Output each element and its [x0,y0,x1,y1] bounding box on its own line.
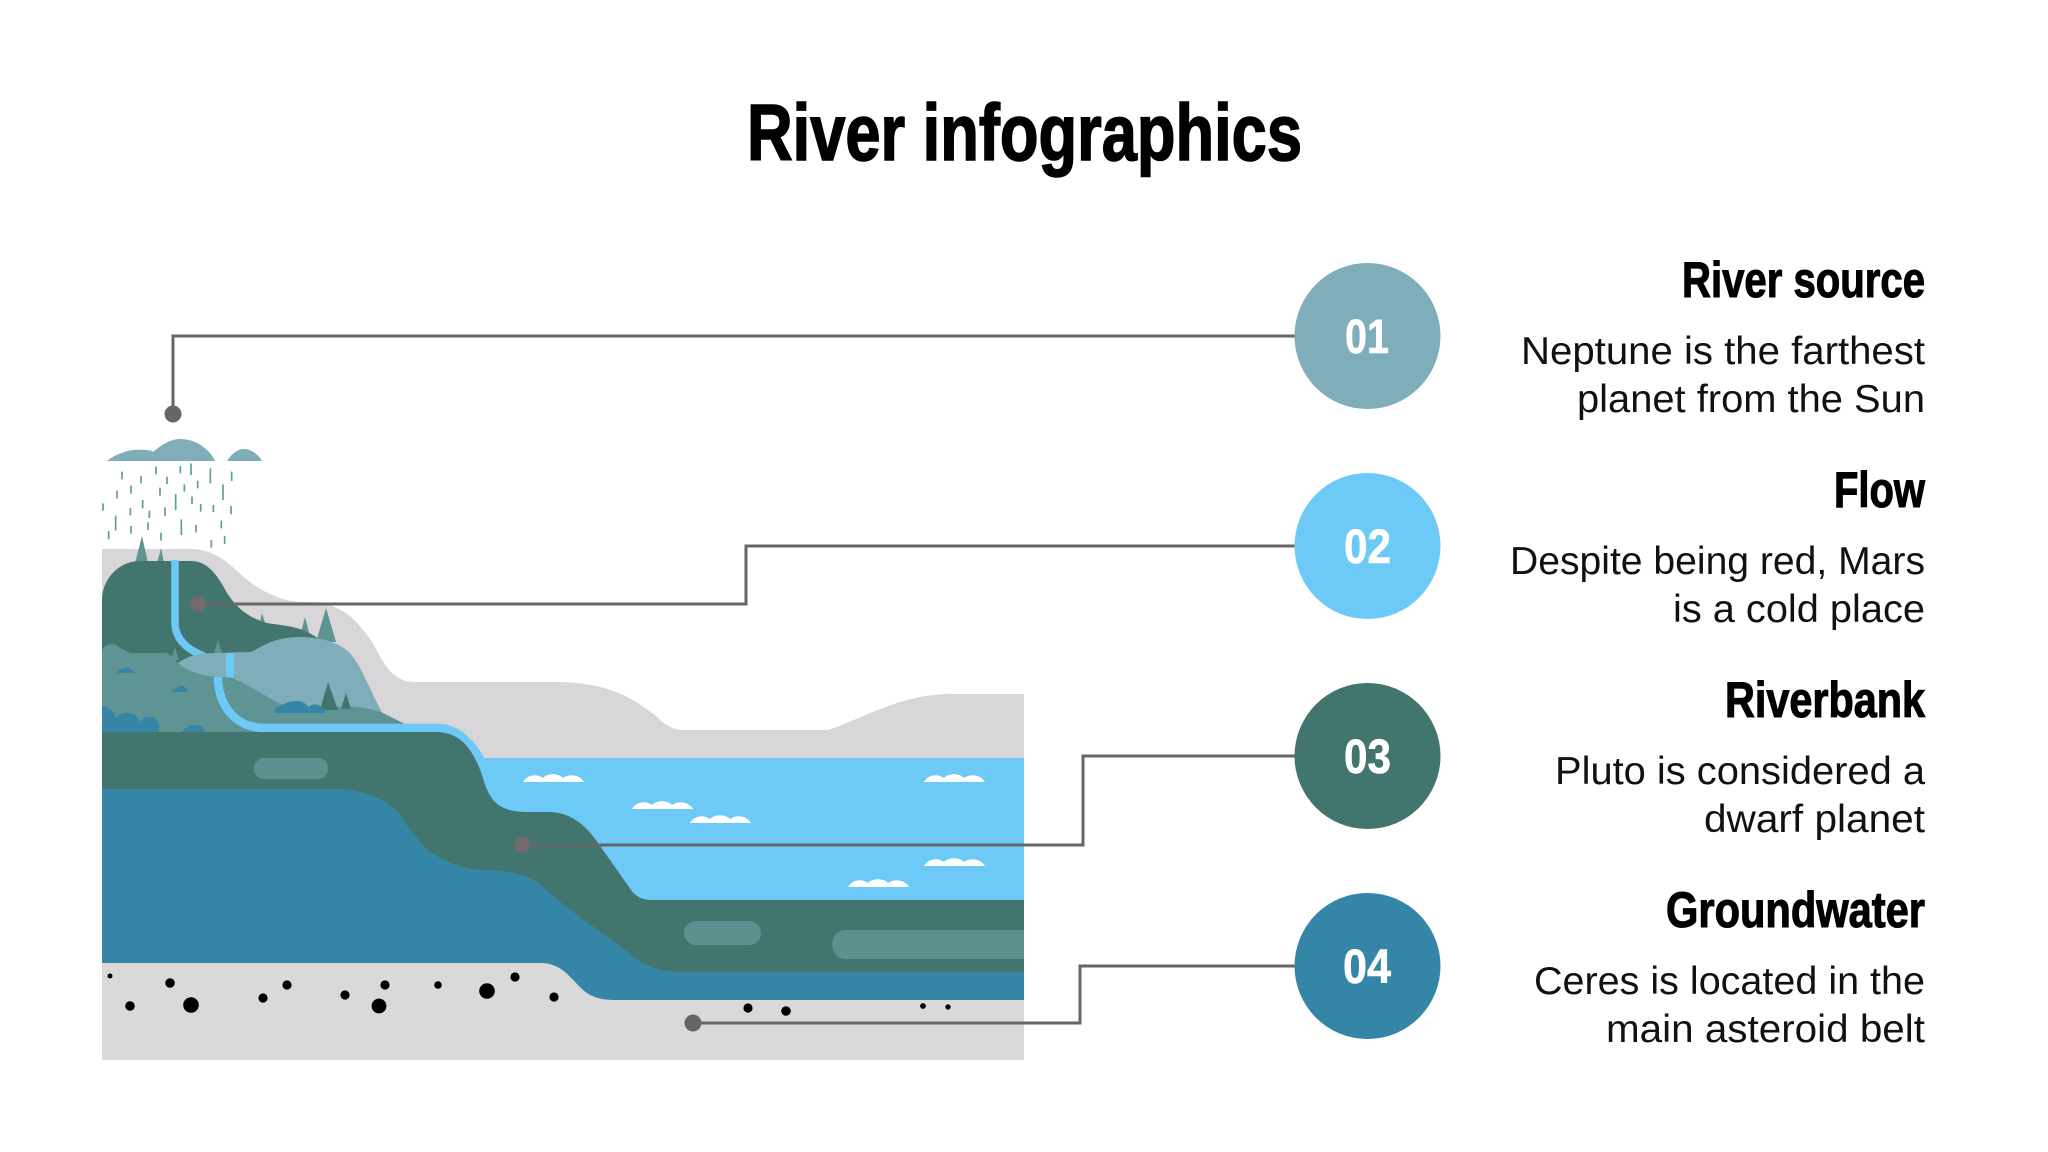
marker 03: 03 [1344,731,1391,784]
text block: riverbank: Riverbank [1725,672,1925,728]
title: River infographics [747,88,1302,177]
text block: groundwater [1534,882,1925,1051]
text block: flow: Despite being red, Mars [1510,540,1925,583]
bedrock grey layer [102,963,1024,1060]
connector 03 [514,756,1295,853]
rain [103,463,232,559]
connector 02 [190,546,1295,612]
text block: river source: Neptune is the farthest [1521,330,1925,373]
marker 01 [1294,263,1440,409]
lake wave marks [523,774,985,887]
connector 04 [684,966,1295,1032]
marker 02: 02 [1344,521,1391,574]
connector 01 [164,336,1295,422]
trees on the hilltops [135,536,336,642]
marker 02 [1294,473,1440,619]
text block: flow: Flow [1834,462,1925,518]
background grey hills [102,549,1024,780]
marker 04 [1294,893,1440,1039]
marker 03 [1294,683,1440,829]
text block: river source: River source [1682,252,1925,308]
text block: riverbank: dwarf planet [1704,798,1925,841]
text block: groundwater: Groundwater [1666,882,1925,938]
clouds [107,439,262,461]
text block: groundwater: Ceres is located in the [1534,960,1925,1003]
text block: flow: is a cold place [1673,588,1925,631]
marker 01: 01 [1345,311,1389,364]
river landscape illustration [102,439,1024,1060]
green layer pills [254,758,1024,959]
light teal hill [178,637,384,720]
riverbank green layer [102,732,1024,972]
blue bushes [102,668,326,732]
river crossing the teal hill [226,653,234,677]
medium teal hill [102,644,410,735]
text block: river source: planet from the Sun [1577,378,1925,421]
river course into the lake [218,677,484,770]
bedrock pebbles [108,972,951,1016]
text block: groundwater: main asteroid belt [1606,1008,1925,1051]
dark trees on teal hill [320,682,351,710]
text block: riverbank [1555,672,1925,841]
dark green upper hill [102,561,322,732]
groundwater blue layer [102,780,1024,1002]
text block: riverbank: Pluto is considered a [1555,750,1925,793]
lake [470,758,1024,908]
small trees on dark hill [171,640,223,660]
upper river [175,560,204,656]
marker 04: 04 [1343,941,1391,994]
text block: river source [1521,252,1925,421]
text block: flow [1510,462,1925,631]
